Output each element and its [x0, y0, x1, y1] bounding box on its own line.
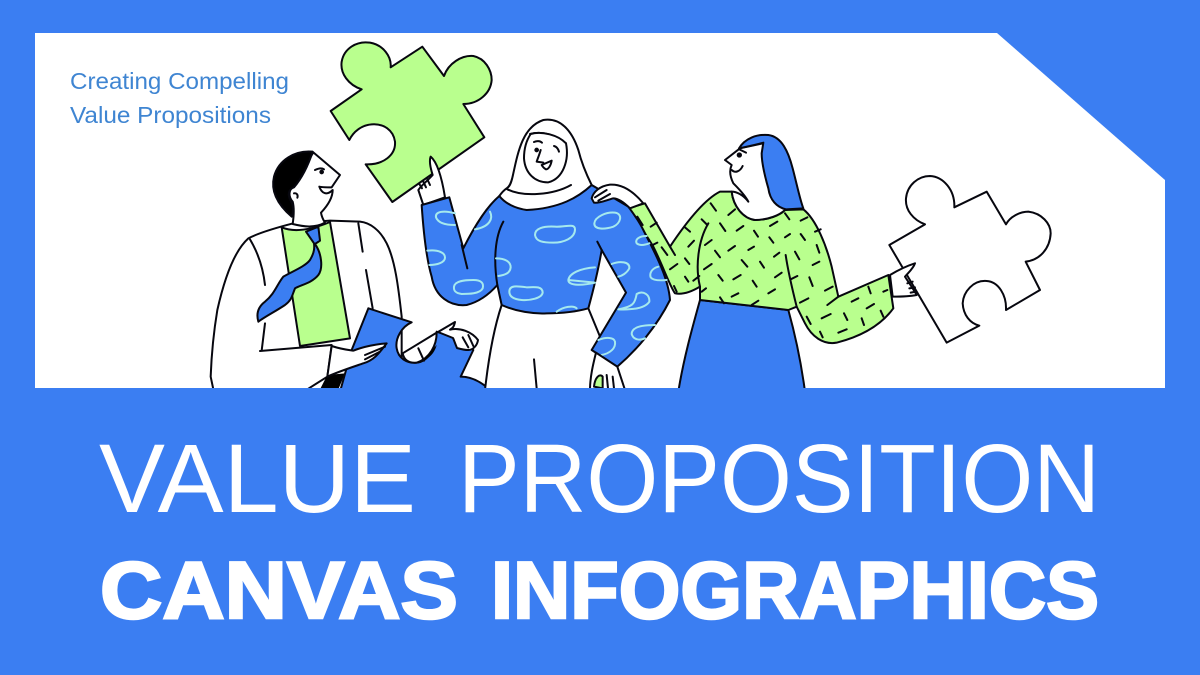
black shadow under wrist [320, 374, 344, 388]
green shirt [282, 222, 350, 346]
figure: woman in green sweater [628, 135, 893, 392]
title: CANVAS INFOGRAPHICS [100, 546, 1099, 636]
pocket hand [590, 353, 625, 390]
subtitle text: Creating Compelling [70, 68, 289, 94]
figure: woman in hijab and blue sweater [418, 120, 670, 390]
hijab [499, 120, 592, 210]
subtitle text [70, 68, 289, 128]
jacket [211, 221, 402, 389]
trousers [485, 305, 600, 390]
face details [294, 168, 324, 198]
title: VALUE PROPOSITION [99, 424, 1100, 533]
illustration: team with puzzle pieces [211, 42, 1051, 392]
skirt [678, 300, 805, 392]
figure: man with tie [211, 151, 492, 392]
icon: green puzzle piece [331, 42, 492, 202]
title: CANVAS INFOGRAPHICS: INFOGRAPHICS [491, 546, 1099, 636]
head [289, 152, 340, 226]
icon: white puzzle piece [889, 176, 1051, 343]
subtitle text: Value Propositions [70, 102, 271, 128]
hair [739, 135, 803, 209]
title: VALUE PROPOSITION: PROPOSITION [458, 424, 1100, 533]
title: VALUE PROPOSITION: VALUE [99, 424, 416, 533]
tie [257, 227, 321, 322]
neck and face [725, 143, 793, 220]
sweater [628, 192, 893, 343]
right hand fingers over piece [890, 263, 917, 297]
raised hand [418, 157, 445, 205]
panel: white illustration card with cut corner [35, 33, 1165, 388]
hair [273, 151, 313, 217]
notch with cuff of other hand [403, 333, 437, 363]
sweater blobs [427, 212, 667, 355]
sweater dashes [637, 203, 887, 337]
hands [327, 343, 387, 377]
cuff [262, 352, 263, 353]
blue puzzle piece [340, 308, 492, 392]
blue sweater [422, 185, 670, 367]
eye and smile [738, 153, 741, 157]
title: CANVAS INFOGRAPHICS: CANVAS [100, 546, 458, 636]
face [524, 133, 567, 182]
hand on shoulder [592, 185, 643, 208]
